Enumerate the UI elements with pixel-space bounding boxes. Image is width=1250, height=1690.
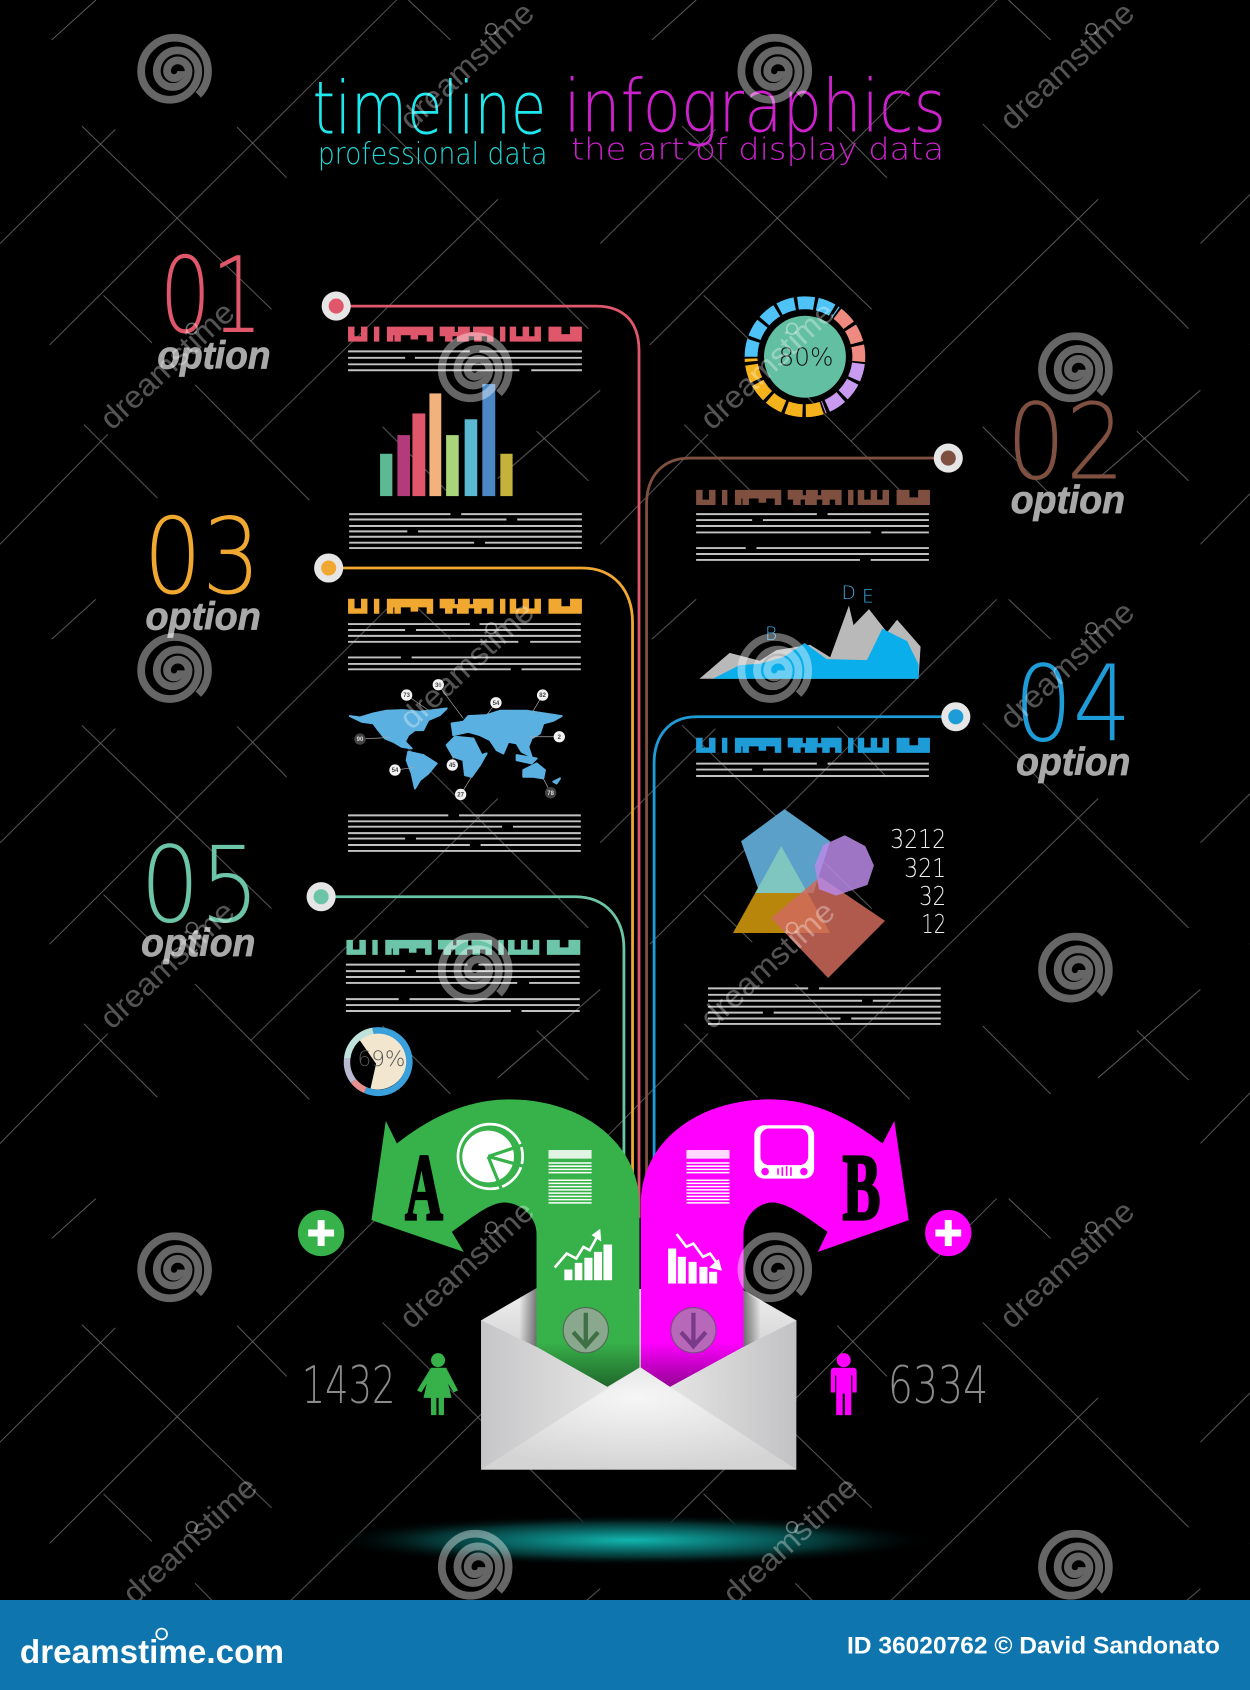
world map with callouts: 90 [357, 737, 364, 743]
label 02 option: 02 [1006, 381, 1125, 504]
watermark text: dreamstime [116, 1469, 264, 1611]
world map with callouts [350, 679, 565, 800]
glow under envelope [323, 1514, 937, 1566]
watermark text: dreamstime [993, 0, 1141, 137]
node 05 [307, 882, 336, 911]
subheading: professional data: professional data [318, 137, 547, 172]
label 04 option: option [1016, 741, 1130, 784]
footer band [0, 1600, 1250, 1690]
world map with callouts: 2 [558, 735, 562, 741]
text lines 04 upper [696, 764, 929, 776]
watermark text: dreamstime [93, 894, 241, 1036]
mini text block [548, 1150, 592, 1203]
world map with callouts: 82 [539, 693, 547, 699]
bar chart [380, 384, 513, 496]
line 05 teal [321, 897, 624, 1196]
watermark text: dreamstime [393, 1193, 541, 1335]
donut chart 80%: 80% [779, 342, 834, 371]
watermark text [93, 0, 1141, 1611]
text lines 05 upper [346, 965, 580, 983]
title [312, 64, 946, 172]
header block 03 [348, 599, 582, 614]
watermark text: dreamstime [993, 1193, 1141, 1335]
world map with callouts: 54 [493, 701, 500, 707]
plus button B [925, 1210, 971, 1256]
letter B: B [843, 1134, 880, 1240]
area chart: B [765, 624, 777, 645]
line 04 blue [654, 717, 956, 1186]
watermark text: dreamstime [693, 894, 842, 1036]
label 01 option: option [157, 335, 270, 378]
chart values: 321 [904, 854, 946, 884]
icon: male figure [831, 1353, 857, 1415]
envelope back flap [481, 1288, 796, 1401]
watermark text: dreamstime [693, 295, 842, 436]
text lines 02 upper [696, 514, 929, 532]
footer logo spiral [156, 1629, 167, 1639]
count 6334: 6334 [888, 1356, 988, 1416]
text lines 03 bottom [348, 815, 581, 851]
icon: download B [671, 1308, 716, 1353]
label 04 option: 04 [1014, 642, 1131, 765]
world map with callouts: 54 [392, 768, 399, 774]
watermark text: dreamstime [393, 0, 541, 137]
area chart: D [842, 583, 856, 604]
icon: download A [563, 1308, 608, 1353]
watermark text: dreamstime [393, 594, 541, 736]
header block 02 [696, 490, 930, 505]
arrow B magenta [641, 1099, 909, 1387]
area chart: E [862, 586, 874, 607]
label 03 option: 03 [143, 495, 261, 618]
footer credit: ID 36020762 © David Sandonato [847, 1633, 1220, 1659]
chart values [890, 825, 946, 940]
line 01 red [336, 306, 639, 1218]
node 03 [314, 553, 343, 583]
world map with callouts: 27 [457, 792, 465, 798]
pie chart 69% [347, 1030, 409, 1093]
text lines 01 lower [349, 514, 582, 548]
text lines 03 lower [348, 657, 581, 669]
icon: tv [754, 1125, 814, 1179]
label 05 option: 05 [140, 824, 260, 947]
world map with callouts: 45 [449, 763, 456, 769]
watermark text: dreamstime [716, 1469, 864, 1611]
watermark text: dreamstime [993, 594, 1141, 736]
label 03 option: option [145, 595, 261, 638]
line 03 orange [329, 568, 633, 1207]
text lines 02 lower [696, 548, 929, 560]
overlapping shapes chart [733, 809, 946, 978]
heading: timeline: timeline [313, 67, 546, 152]
timeline connector lines [321, 306, 956, 1218]
node 01 [322, 292, 351, 321]
label 01 option: 01 [159, 234, 263, 357]
text lines 04 lower [708, 988, 941, 1024]
chart values: 12 [921, 910, 946, 940]
text lines 01 upper [348, 351, 582, 370]
text lines 05 lower [346, 999, 580, 1011]
label 02 option: option [1011, 479, 1125, 522]
header block 04 [696, 738, 930, 753]
donut chart 80% [751, 303, 859, 411]
footer logo text: dreamstime.com [20, 1634, 284, 1671]
area chart [699, 583, 921, 679]
watermark text: dreamstime [93, 295, 241, 436]
mini text block [686, 1150, 730, 1203]
node 02 [934, 444, 963, 473]
world map with callouts: 73 [403, 693, 411, 699]
chart values: 32 [919, 882, 946, 912]
icon: rising chart [555, 1229, 612, 1280]
envelope front [481, 1320, 796, 1470]
subheading: the art of display data: the art of display data [571, 133, 944, 168]
label 05 option: option [141, 922, 255, 965]
world map with callouts: 78 [547, 791, 555, 797]
watermark spirals [141, 38, 1109, 1596]
icon: pie [458, 1124, 524, 1191]
watermark copyright rings [186, 24, 1097, 1533]
header block 05 [346, 940, 580, 955]
count 1432: 1432 [302, 1356, 395, 1416]
heading: infographics: infographics [564, 64, 946, 149]
timeline node dots [307, 292, 970, 911]
letter A: A [405, 1134, 443, 1240]
pie chart 69%: 69% [358, 1047, 405, 1072]
text lines 03 upper [348, 624, 581, 642]
header block 01 [348, 327, 582, 342]
icon: female figure [417, 1353, 458, 1415]
arrow A green [371, 1099, 639, 1387]
icon: falling chart [668, 1234, 722, 1284]
world map with callouts: 36 [435, 683, 442, 689]
line 02 brown [647, 458, 948, 1218]
chart values: 3212 [890, 825, 946, 855]
node 04 [941, 702, 970, 731]
plus button A [298, 1210, 344, 1256]
